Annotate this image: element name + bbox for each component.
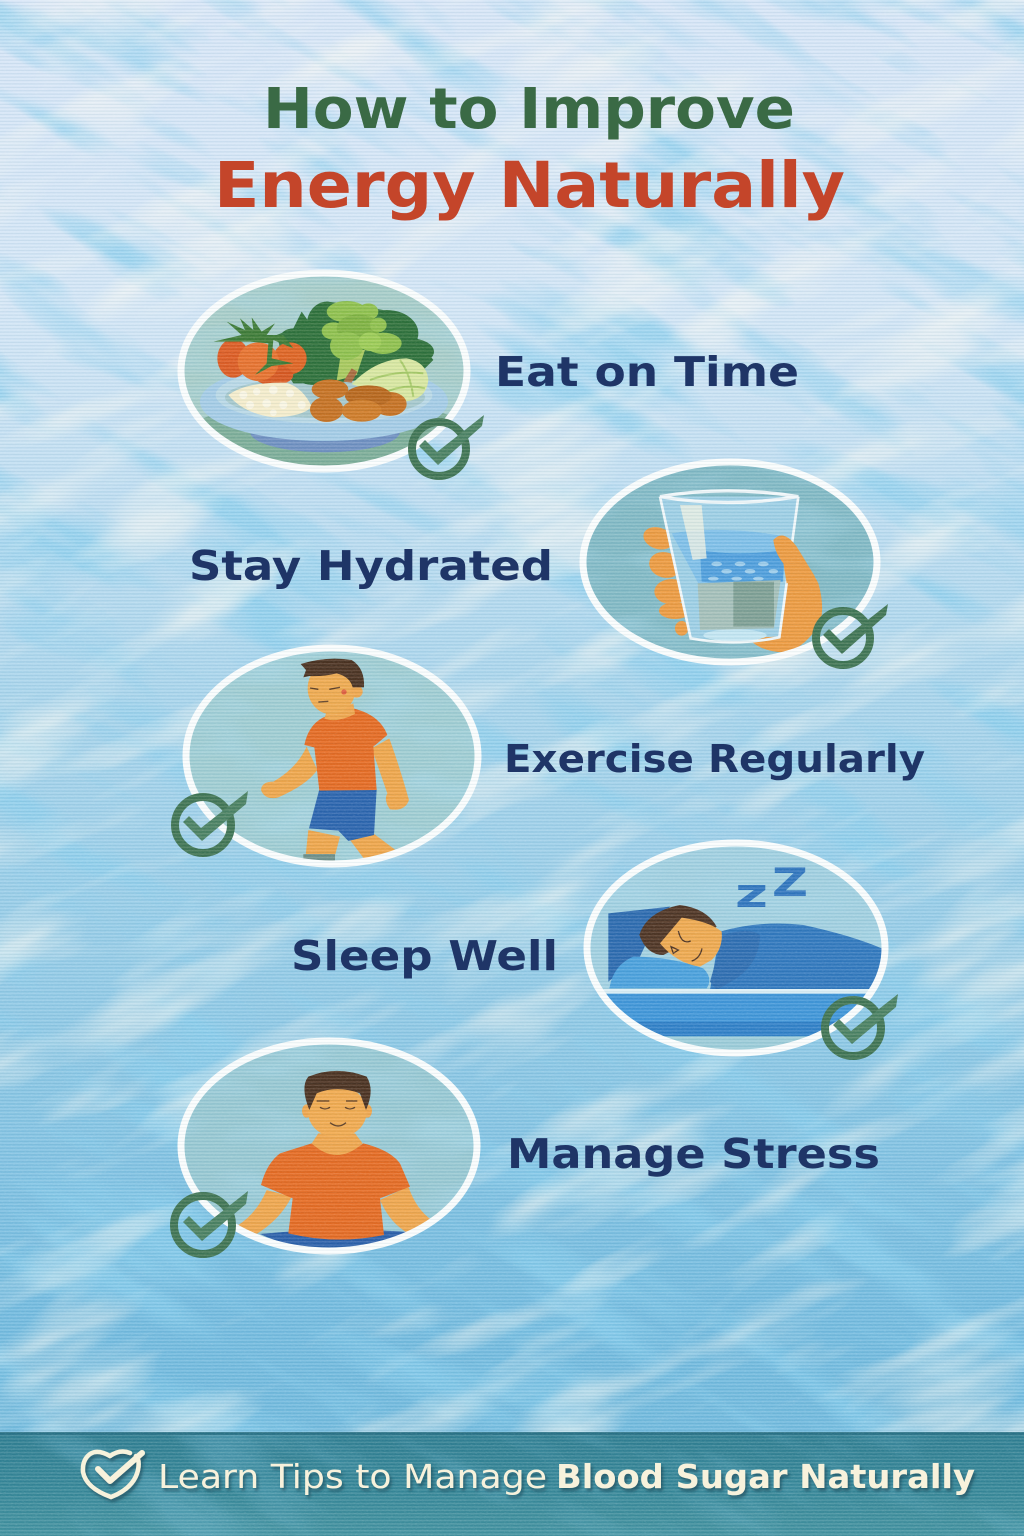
stem (343, 368, 357, 383)
panel: stay hydrated (575, 455, 888, 670)
sleep letters: Z (772, 861, 808, 906)
rice (228, 383, 312, 417)
plate (200, 374, 448, 452)
dark pillow (608, 907, 670, 982)
disc background with meditating man (175, 1035, 485, 1260)
shirt (261, 1143, 410, 1240)
blanket (710, 923, 882, 990)
hair (301, 659, 364, 687)
leafy greens (277, 302, 434, 385)
thumb (773, 535, 815, 583)
nuggets (310, 379, 407, 422)
hair (304, 1071, 371, 1110)
panel: eat on time (170, 265, 484, 486)
label: stay hydrated: Stay Hydrated (189, 542, 553, 590)
white ring (186, 648, 478, 864)
arms (238, 1190, 292, 1235)
label: eat on time: Eat on Time (495, 348, 799, 396)
panel: manage stress (174, 1035, 485, 1260)
head (324, 703, 355, 720)
icon: check badge (816, 604, 888, 665)
sleep letters (735, 861, 808, 917)
hand palm and fingers (640, 523, 822, 652)
white ring (181, 273, 467, 469)
icon: check badge (174, 1191, 248, 1254)
panel: exercise regularly (175, 640, 490, 870)
shirt (304, 708, 387, 791)
tomatoes (213, 317, 307, 385)
icon: heart check (83, 1452, 142, 1497)
face details (317, 1101, 357, 1126)
bed (603, 989, 877, 994)
disc background with sleeper (590, 847, 882, 1050)
footer call to action (83, 1452, 975, 1497)
arms (261, 747, 317, 798)
hair (639, 905, 717, 955)
white ring (587, 843, 885, 1053)
disc background with plate of food (184, 276, 464, 466)
icon: check badge (175, 791, 248, 853)
icon: check badge (825, 994, 898, 1056)
glass (660, 491, 798, 642)
white ring (181, 1041, 477, 1251)
label: sleep well: Sleep Well (291, 932, 558, 980)
light pillow (609, 957, 709, 988)
label: exercise regularly: Exercise Regularly (504, 737, 925, 781)
face details (310, 687, 340, 702)
blanket shoulder fold (710, 931, 760, 990)
footer text: Blood Sugar Naturally (556, 1457, 975, 1496)
broccoli (322, 301, 402, 381)
sleep letters: z (735, 871, 768, 917)
title (214, 77, 845, 222)
neck (312, 1133, 363, 1155)
panel: sleep well (584, 840, 898, 1060)
shorts (309, 789, 377, 841)
disc background with glass and hand (586, 466, 874, 658)
legs (260, 1230, 408, 1248)
title line one: How to Improve (263, 77, 795, 142)
cabbage (352, 358, 428, 402)
disc background with walking boy (190, 652, 474, 860)
white ring (583, 462, 877, 662)
icon: check badge (412, 415, 484, 476)
title line two: Energy Naturally (214, 149, 845, 222)
label: manage stress: Manage Stress (507, 1130, 880, 1178)
footer text: Learn Tips to Manage (158, 1457, 547, 1496)
ears and face (302, 1104, 311, 1118)
face (660, 918, 722, 967)
legs (306, 830, 340, 856)
footer band background (0, 1432, 1024, 1536)
